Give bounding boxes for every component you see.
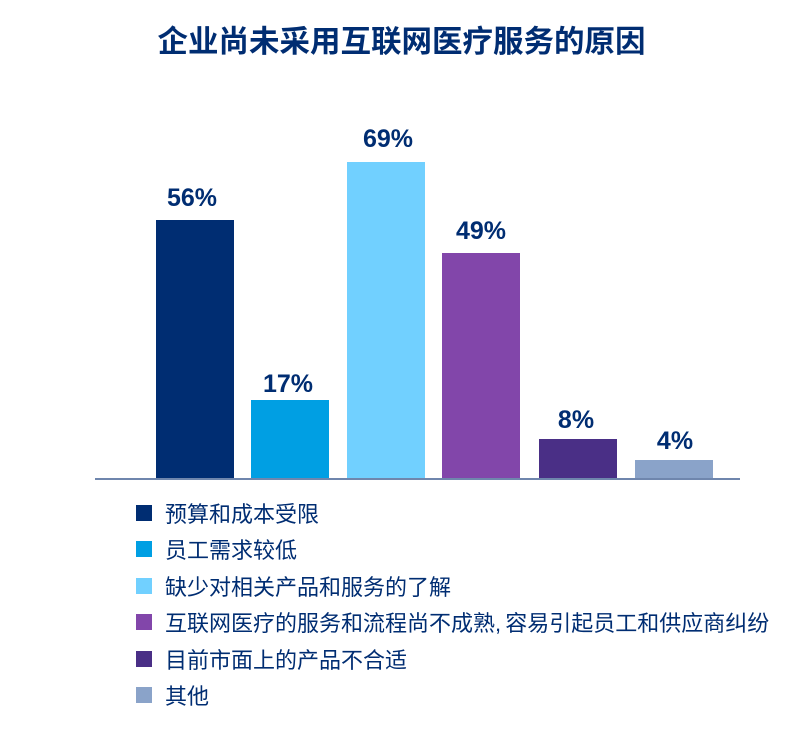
value: 56%: 56% (167, 184, 217, 212)
legend item: lack of understanding: 缺少对相关产品和服务的了解 (165, 575, 451, 600)
legend item: unsuitable products: 目前市面上的产品不合适 (165, 648, 407, 673)
legend item: other (136, 684, 209, 709)
bar: 8% (539, 439, 617, 479)
bar: 17% (251, 400, 329, 479)
legend item: other: 其他 (165, 684, 209, 709)
value: 17%: 17% (263, 370, 313, 398)
value: 8%: 8% (558, 406, 594, 434)
bar: 69% (347, 162, 425, 479)
legend (136, 502, 769, 709)
title: 企业尚未采用互联网医疗服务的原因 (158, 25, 646, 59)
bar: 49% (442, 253, 520, 479)
bar chart (95, 125, 740, 480)
legend item: immature services: 互联网医疗的服务和流程尚不成熟, 容易引起员工和供应商纠纷 (165, 611, 769, 636)
value: 69%: 69% (363, 125, 413, 153)
axis line (95, 478, 740, 480)
bar: 56% (156, 220, 234, 479)
value: 4%: 4% (657, 427, 693, 455)
legend item: budget: 预算和成本受限 (165, 502, 319, 527)
bar: 4% (635, 460, 713, 479)
value: 49%: 49% (456, 217, 506, 245)
legend item: low demand: 员工需求较低 (165, 538, 297, 563)
